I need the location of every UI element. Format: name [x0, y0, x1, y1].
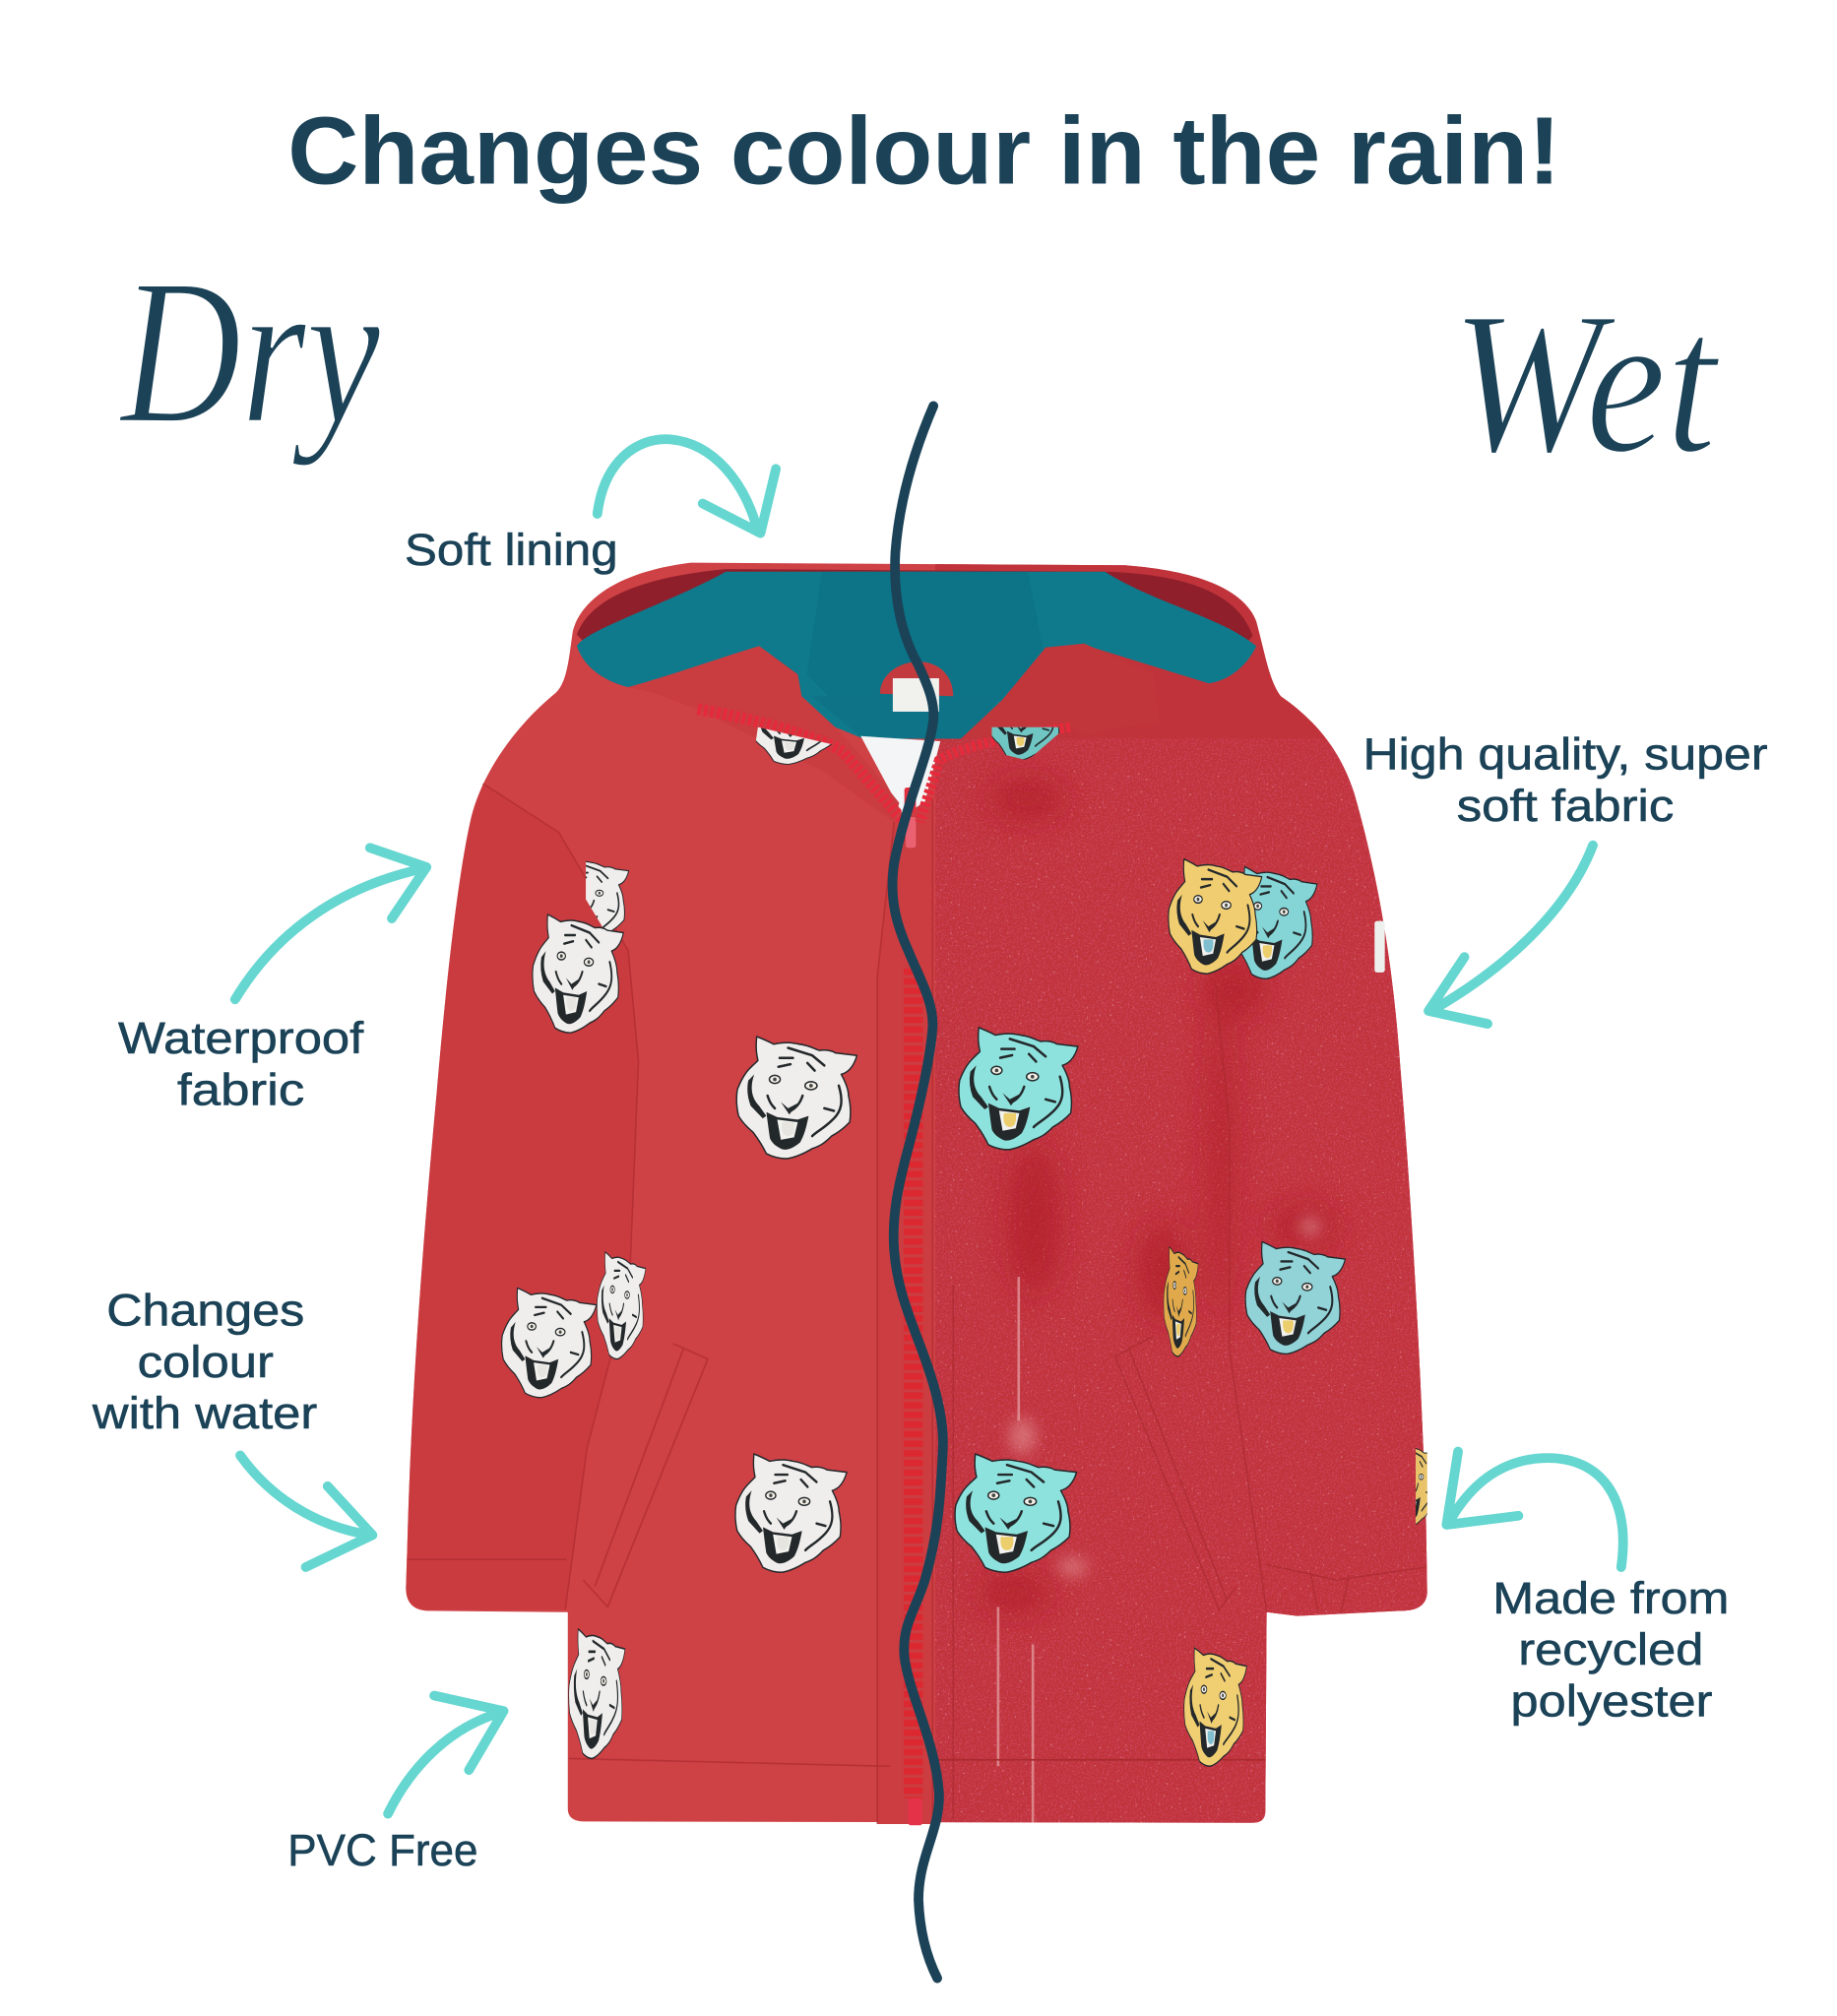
icon: tiger, yellow right hem: [1184, 1648, 1246, 1766]
heading: Dry: Dry: [118, 236, 380, 467]
jacket silhouette: [406, 563, 1427, 1823]
label: High quality, super soft fabric: soft fabric: [1457, 781, 1674, 831]
icon: tiger, narrow left side: [597, 1252, 646, 1359]
front placket and zipper: [698, 709, 1070, 1825]
icon: tiger, cuff sliver: [1416, 1448, 1427, 1526]
label: Made from recycled polyester: Made from: [1492, 1573, 1729, 1623]
icon: tiger, lower left sleeve: [502, 1288, 597, 1398]
divider line between dry and wet: [893, 406, 943, 1979]
label: PVC Free: PVC Free: [287, 1825, 477, 1875]
icon: tiger, collar left: [756, 726, 833, 765]
icon: tiger, orange narrow: [1164, 1247, 1198, 1356]
icon: tiger, collar right: [991, 726, 1059, 760]
arrow: waterproof fabric: [235, 848, 426, 999]
label: Waterproof fabric: [118, 1013, 364, 1114]
title: Changes colour in the rain!: [287, 96, 1560, 205]
hood lining: [577, 569, 1256, 822]
icon: tiger, yellow shoulder: [1169, 859, 1262, 974]
icon: tiger, left pocket: [735, 1454, 847, 1572]
arrow: recycled polyester: [1446, 1452, 1623, 1567]
label: Changes colour with water: [92, 1286, 317, 1438]
label: Waterproof fabric: fabric: [177, 1064, 304, 1114]
label: Made from recycled polyester: recycled: [1518, 1624, 1703, 1674]
right lapel: [960, 644, 1160, 740]
icon: tiger, left chest: [736, 1037, 856, 1159]
seams, pockets, cuffs and hem: [408, 784, 1425, 1824]
left lapel: [628, 646, 899, 822]
icon: tiger, teal right sleeve: [1245, 1241, 1346, 1354]
arrow: soft lining: [598, 439, 776, 534]
icon: tiger, teal right pocket: [955, 1454, 1077, 1572]
label: Made from recycled polyester: [1492, 1573, 1729, 1726]
arrow: high quality fabric: [1428, 846, 1593, 1024]
icon: tiger, left sleeve: [533, 914, 623, 1033]
arrow: PVC free: [388, 1696, 504, 1814]
icon: tiger, teal behind: [1231, 866, 1317, 978]
tiger patches: dry side: [502, 690, 856, 1758]
tiger patches: wet side: [955, 683, 1438, 1766]
wet side texture: [935, 564, 1427, 1823]
arrow: changes colour: [240, 1455, 372, 1567]
label: Waterproof fabric: Waterproof: [118, 1013, 364, 1063]
heading: Wet: Wet: [1452, 270, 1721, 495]
label: High quality, super soft fabric: [1362, 729, 1768, 831]
icon: tiger, teal right chest: [959, 1028, 1078, 1150]
label: High quality, super soft fabric: High quality, super: [1362, 729, 1768, 780]
label: Soft lining: Soft lining: [405, 525, 618, 575]
icon: tiger, upper sleeve behind: [586, 860, 630, 931]
left sleeve shading: [406, 784, 639, 1609]
label: Changes colour with water: with water: [92, 1388, 317, 1438]
jacket illustration: [406, 514, 1475, 1850]
icon: tiger, left hem: [569, 1629, 625, 1758]
label: Made from recycled polyester: polyester: [1511, 1675, 1712, 1726]
label: Changes colour with water: colour: [138, 1337, 274, 1387]
label: Changes colour with water: Changes: [106, 1286, 304, 1336]
